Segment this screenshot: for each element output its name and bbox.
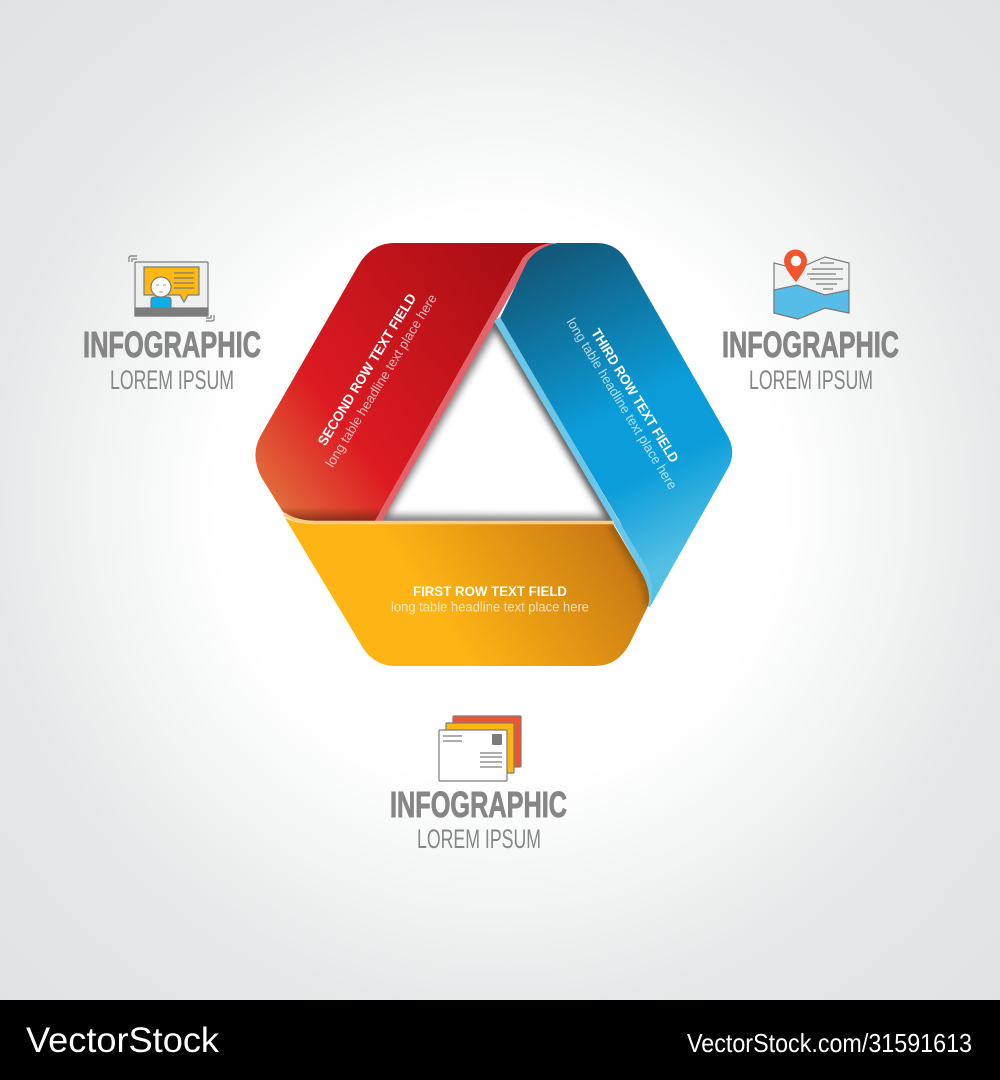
third row label: long table headline text place here: [564, 315, 680, 492]
left heading: INFOGRAPHIC: [83, 324, 261, 365]
red band: [255, 243, 558, 521]
right item: map: [722, 250, 899, 395]
icon: postcards: [439, 716, 521, 781]
yellow band light edge: [284, 514, 614, 522]
right heading: INFOGRAPHIC: [722, 324, 899, 365]
first row label: [391, 583, 589, 614]
blue band light edge: [494, 317, 652, 607]
bottom item: postcards: [390, 716, 567, 854]
first row label: long table headline text place here: [391, 600, 589, 614]
icon: map with pin: [774, 250, 849, 319]
second row label: SECOND ROW TEXT FIELD: [314, 291, 419, 448]
bottom heading: INFOGRAPHIC: [390, 784, 567, 825]
red band bottom shade: [278, 507, 383, 521]
second row label: long table headline text place here: [323, 291, 440, 470]
yellow band: [284, 514, 649, 666]
first row label: FIRST ROW TEXT FIELD: [413, 583, 567, 599]
footer url: VectorStock.com/31591613: [687, 1028, 972, 1058]
blue band: [494, 243, 732, 607]
icon: presenter screen: [129, 256, 214, 321]
triangle hole with inner shadow: [378, 318, 616, 522]
right subheading: LOREM IPSUM: [749, 365, 873, 395]
bottom subheading: LOREM IPSUM: [417, 824, 541, 854]
left subheading: LOREM IPSUM: [110, 365, 234, 395]
footer logo: VectorStock: [26, 1021, 220, 1060]
yellow fold shadow: [613, 524, 649, 606]
left item: presenter: [83, 256, 261, 395]
red band light edge: [375, 243, 558, 521]
third row label: THIRD ROW TEXT FIELD: [588, 326, 682, 465]
footer bar: [0, 1000, 1000, 1080]
